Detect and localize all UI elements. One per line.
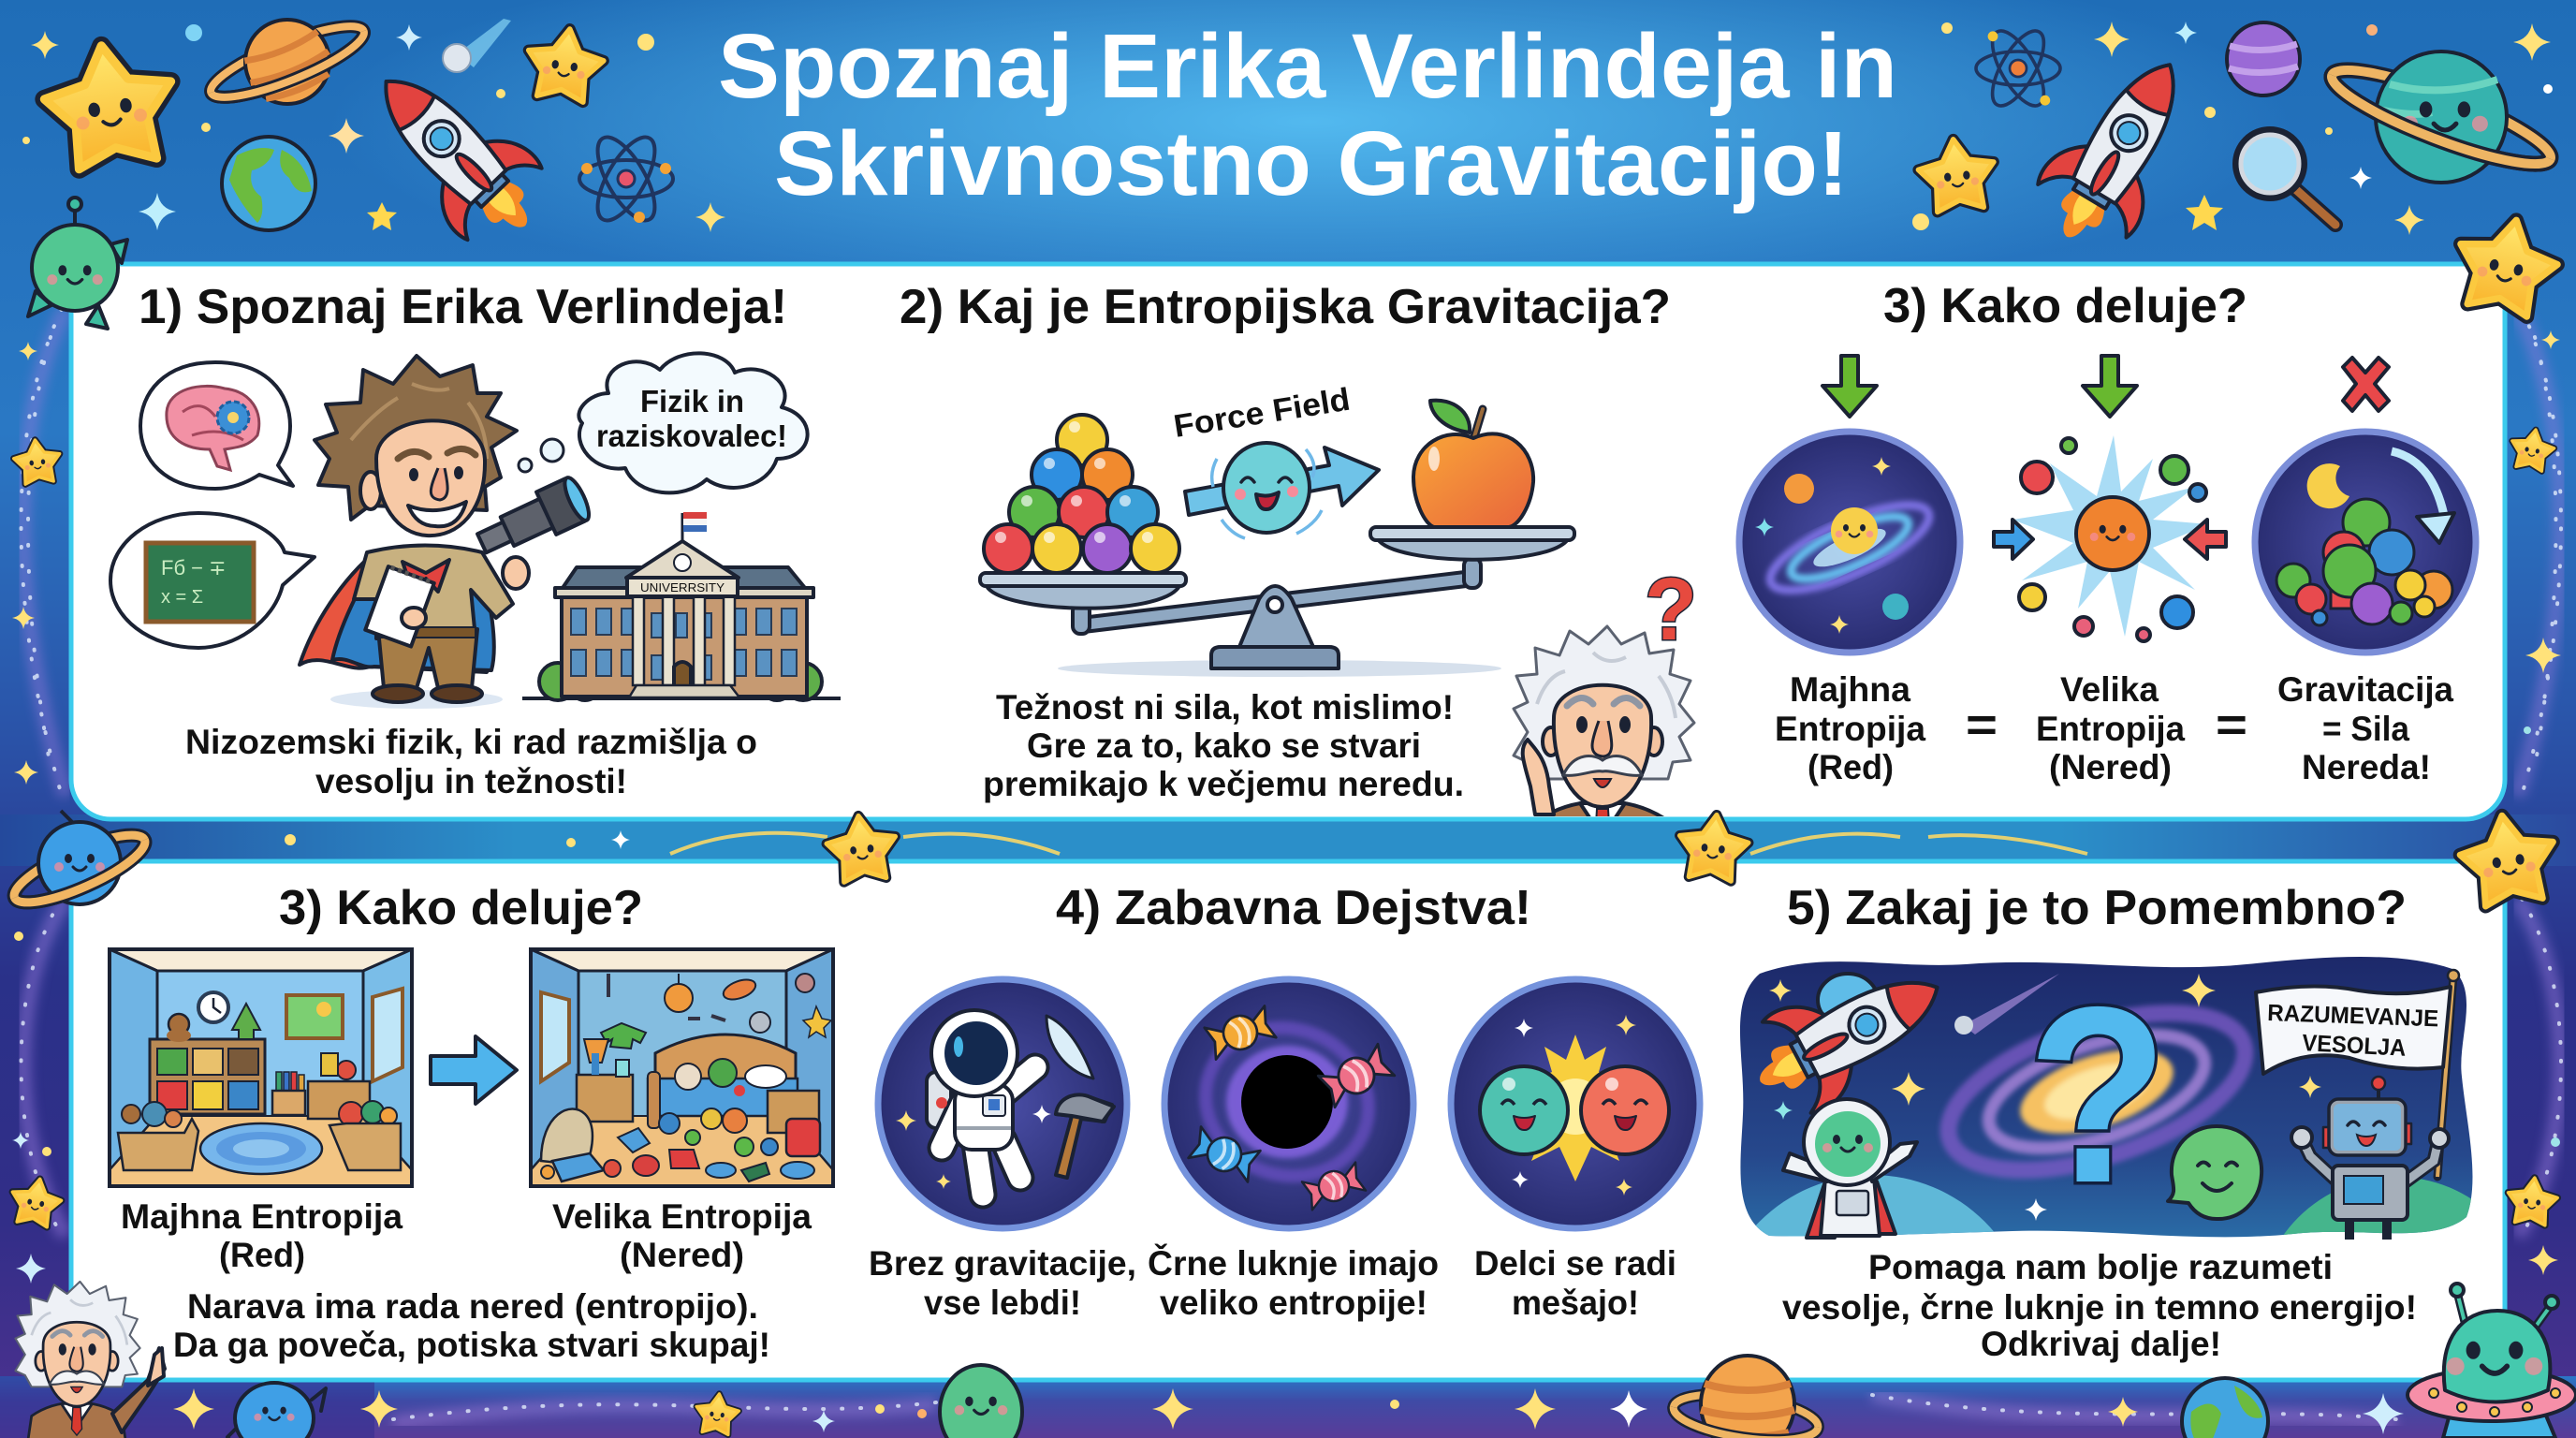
heading: 2) Kaj je Entropijska Gravitacija? xyxy=(900,280,1671,334)
icon: red cross xyxy=(2343,358,2389,411)
description: Nizozemski fizik, ki rad razmišlja o xyxy=(185,723,757,761)
apple xyxy=(1413,401,1533,527)
icon: teal ringed planet with face xyxy=(2324,51,2558,183)
speech bubble: chalkboard: Fб − ∓ xyxy=(161,556,227,580)
icon: middle star one xyxy=(824,813,900,884)
panel: upper white panel xyxy=(71,264,2505,819)
panel: section 1 xyxy=(110,280,841,800)
captions: = Sila xyxy=(2322,710,2409,748)
header decoration: icons top left xyxy=(28,0,673,329)
icon: flag with label xyxy=(2256,970,2459,1177)
label: Force Field: Force Field xyxy=(1171,382,1353,445)
thought cloud xyxy=(519,353,808,492)
icon: left side star xyxy=(12,437,63,485)
header decoration: icons top right xyxy=(1915,22,2558,265)
speech bubble: chalkboard: x = Σ xyxy=(161,587,203,608)
tidy room illustration xyxy=(110,949,412,1186)
messy room illustration xyxy=(531,949,833,1186)
captions: Črne luknje imajo xyxy=(1148,1243,1439,1283)
circle: floating astronaut xyxy=(878,979,1127,1228)
icon: bottom earth xyxy=(2182,1378,2268,1438)
scene: universe xyxy=(1739,957,2473,1240)
description: premikajo k večjemu neredu. xyxy=(983,765,1464,803)
character: Einstein thinking xyxy=(1512,624,1696,816)
captions: (Nered) xyxy=(2049,748,2172,786)
icon: yellow mini star xyxy=(367,202,397,230)
description: Pomaga nam bolje razumeti xyxy=(1868,1248,2333,1286)
icon: atom xyxy=(579,129,673,228)
description xyxy=(983,688,1464,803)
room captions: (Red) xyxy=(219,1236,305,1274)
icon: big smiling star xyxy=(38,37,182,172)
burst with orange particle xyxy=(1994,435,2226,641)
description: Gre za to, kako se stvari xyxy=(1027,726,1421,765)
captions: veliko entropije! xyxy=(1160,1284,1427,1322)
icon: atom right xyxy=(1976,23,2060,113)
description: Da ga poveča, potiska stvari skupaj! xyxy=(173,1326,770,1364)
circle: pile xyxy=(2255,432,2476,653)
icon: green arrow two xyxy=(2083,356,2137,417)
icon: magnifier xyxy=(2237,131,2335,225)
icon: green speech blob xyxy=(2168,1126,2261,1219)
panel: section 2 xyxy=(900,280,1697,873)
title: Skrivnostno Gravitacijo! xyxy=(774,112,1849,214)
description: vesolju in težnosti! xyxy=(315,762,627,800)
panel: section 4 fun facts xyxy=(869,881,1700,1322)
icon: orange ringed planet xyxy=(196,0,379,132)
description: Težnost ni sila, kot mislimo! xyxy=(996,688,1454,726)
icon: blue arrow between rooms xyxy=(431,1036,517,1104)
icon: middle star right xyxy=(2455,809,2561,909)
icon: green face planet xyxy=(940,1365,1022,1438)
captions: Gravitacija xyxy=(2277,670,2453,709)
description: Odkrivaj dalje! xyxy=(1981,1325,2221,1363)
icon: rocket xyxy=(347,44,564,263)
speech bubble: chalkboard xyxy=(110,513,315,648)
icon: yellow star small xyxy=(2186,195,2223,230)
panel: lower white panel xyxy=(71,861,2505,1380)
captions xyxy=(1775,670,2453,786)
captions: vse lebdi! xyxy=(924,1284,1081,1322)
panel: section 5 why it matters xyxy=(1739,889,2473,1363)
icon: middle star two xyxy=(1676,812,1751,883)
icon: earth xyxy=(222,137,315,230)
cloud label: Fizik in xyxy=(640,384,744,418)
icon: large question mark: ? xyxy=(2027,954,2168,1235)
equals sign two: = xyxy=(2216,698,2247,751)
icon: comet xyxy=(443,19,511,72)
icon: red question mark: ? xyxy=(1645,560,1697,659)
captions xyxy=(869,1243,1676,1322)
pile of colourful balls xyxy=(984,415,1179,573)
captions: Delci se radi xyxy=(1474,1244,1676,1283)
captions: mešajo! xyxy=(1512,1284,1639,1322)
icon: happy star xyxy=(1915,136,1998,213)
equals sign one: = xyxy=(1966,698,1998,751)
icon: bottom star xyxy=(694,1391,740,1436)
captions: Entropija xyxy=(1775,710,1925,748)
room captions: (Nered) xyxy=(620,1236,744,1274)
icon: rocket with dome xyxy=(1734,939,1963,1130)
icon: right side star xyxy=(2508,426,2557,473)
flag text second line: VESOLJA xyxy=(2302,1030,2407,1062)
cloud label second line: raziskovalec! xyxy=(596,418,787,453)
panel: section 3 rooms xyxy=(15,881,833,1438)
icon: small star xyxy=(522,23,607,104)
room captions: Majhna Entropija xyxy=(121,1197,402,1236)
circle: black hole with candy xyxy=(1164,979,1413,1228)
captions: Nereda! xyxy=(2302,748,2431,786)
description xyxy=(173,1287,770,1364)
captions: Majhna xyxy=(1790,670,1910,709)
heading: 3) Kako deluje? xyxy=(1883,279,2247,333)
captions: Entropija xyxy=(2036,710,2185,748)
character: alien astronaut xyxy=(1783,1099,1917,1238)
circle: mixing particles xyxy=(1451,979,1700,1228)
university building xyxy=(522,512,841,700)
description xyxy=(1782,1248,2417,1363)
icon: purple planet xyxy=(2227,22,2300,95)
room captions xyxy=(121,1197,812,1274)
room captions: Velika Entropija xyxy=(552,1197,812,1236)
icon: rocket right xyxy=(2020,37,2217,265)
title: Spoznaj Erika Verlindeja in xyxy=(718,15,1897,117)
icon: bottom orange ringed planet xyxy=(1671,1356,1821,1438)
character: robot xyxy=(2291,1077,2449,1240)
character: Erik Verlinde xyxy=(300,356,593,709)
panel: section 3 how it works xyxy=(1739,279,2476,786)
captions: Velika xyxy=(2060,670,2159,709)
icon: left lower star xyxy=(7,1175,65,1228)
character: Einstein pointing xyxy=(15,1282,165,1438)
description: Narava ima rada nered (entropijo). xyxy=(187,1287,758,1326)
icon: green arrow one xyxy=(1822,356,1877,417)
speech bubble: brain xyxy=(140,362,293,489)
title xyxy=(718,15,1897,214)
icon: green alien in UFO xyxy=(2408,1284,2576,1438)
icon: right corner star xyxy=(2449,210,2565,320)
icon: right lower star xyxy=(2505,1175,2559,1226)
icon: green alien xyxy=(28,198,127,329)
arrow with happy particle xyxy=(1185,443,1379,538)
heading: 1) Spoznaj Erika Verlindeja! xyxy=(139,280,787,334)
heading: 5) Zakaj je to Pomembno? xyxy=(1787,881,2407,935)
university building: UNIVERRSITY xyxy=(640,580,724,594)
description xyxy=(185,723,757,800)
description: vesolje, črne luknje in temno energijo! xyxy=(1782,1288,2417,1327)
icon: blue blob planet xyxy=(227,1383,326,1438)
circle: galaxy xyxy=(1739,432,1960,653)
heading: 4) Zabavna Dejstva! xyxy=(1056,881,1531,935)
heading: 3) Kako deluje? xyxy=(279,881,643,935)
icon: blue ringed planet xyxy=(7,811,153,915)
balance scale xyxy=(980,527,1574,677)
captions: (Red) xyxy=(1808,748,1894,786)
captions: Brez gravitacije, xyxy=(869,1244,1136,1283)
flag text: RAZUMEVANJE xyxy=(2267,1000,2439,1032)
